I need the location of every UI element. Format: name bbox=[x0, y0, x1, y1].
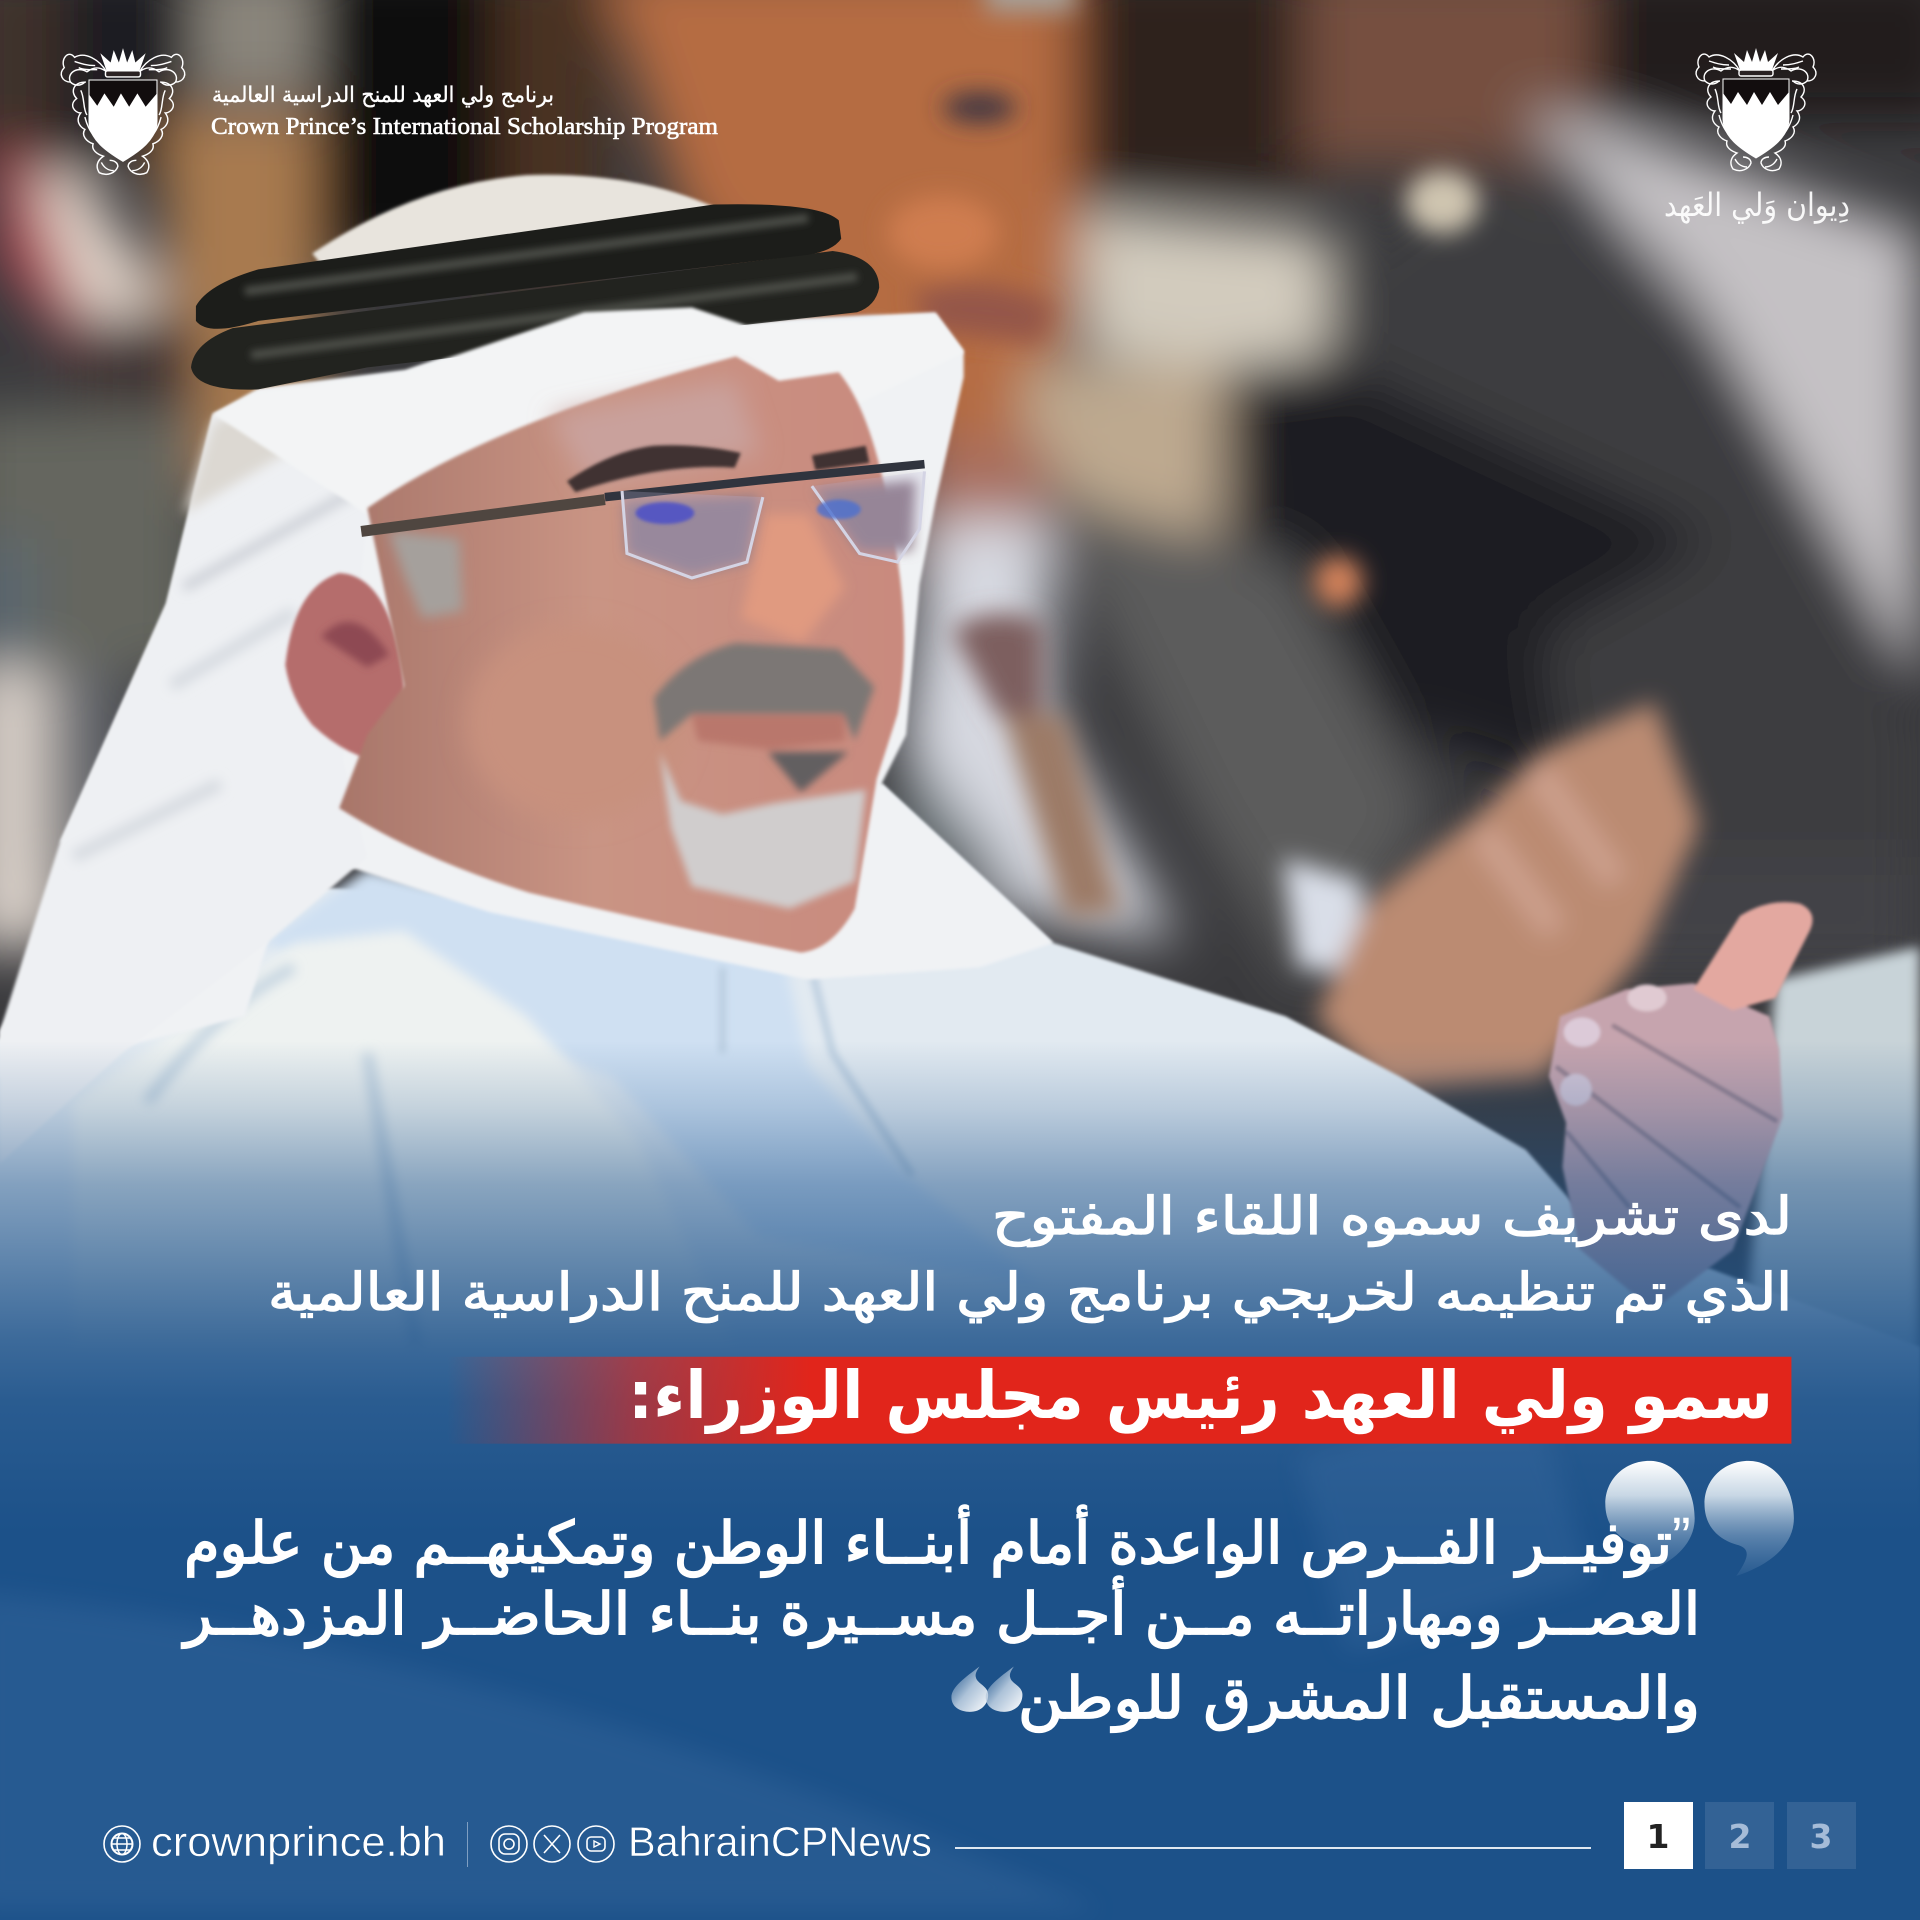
quote text bbox=[181, 1505, 1700, 1733]
intro text: الذي تم تنظيمه لخريجي برنامج ولي العهد للمنح الدراسية العالمية bbox=[268, 1263, 1792, 1323]
intro text: لدى تشريف سموه اللقاء المفتوح bbox=[992, 1187, 1792, 1247]
big opening quote marks bbox=[1605, 1461, 1794, 1576]
main figure: clapping hand bbox=[1549, 902, 1813, 1310]
right crest and diwan calligraphy bbox=[1664, 48, 1850, 224]
main figure: beard bbox=[654, 643, 874, 909]
social footer item: BahrainCPNews bbox=[628, 1818, 932, 1865]
main figure: agal black band bbox=[191, 204, 964, 514]
red heading bar bbox=[447, 1357, 1791, 1444]
main figure: thobe bbox=[0, 784, 1920, 1898]
page indicator 2 bbox=[1705, 1802, 1774, 1869]
icon: youtube bbox=[578, 1826, 614, 1862]
website footer item: crownprince.bh bbox=[151, 1818, 446, 1865]
blue fade overlay bbox=[0, 1041, 1920, 1920]
icon: x bbox=[534, 1826, 570, 1862]
scholarship program logotype: Crown Prince’s International Scholarship Program bbox=[211, 114, 718, 140]
social footer item bbox=[491, 1818, 932, 1865]
scholarship program logotype bbox=[211, 83, 718, 140]
main figure: glasses bbox=[361, 464, 924, 578]
page indicator 1: 1 bbox=[1647, 1817, 1669, 1856]
heading on red bar: سمو ولي العهد رئيس مجلس الوزراء: bbox=[628, 1357, 1773, 1435]
page indicator 3: 3 bbox=[1810, 1817, 1832, 1856]
page indicator 1 bbox=[1624, 1802, 1693, 1869]
quote text: والمستقبل المشرق للوطن bbox=[1018, 1664, 1700, 1733]
scholarship program logotype: برنامج ولي العهد للمنح الدراسية العالمية bbox=[212, 83, 554, 108]
quote text: ” bbox=[1672, 1505, 1691, 1568]
page indicator 3 bbox=[1787, 1802, 1856, 1869]
quote text: العصــر ومهاراتــه مــن أجــل مســيرة بنــاء الحاضــر المزدهــر bbox=[181, 1576, 1700, 1649]
main figure: face bbox=[285, 356, 916, 953]
icon: globe bbox=[104, 1826, 140, 1862]
intro text bbox=[268, 1187, 1792, 1323]
small closing quote marks bbox=[951, 1667, 1022, 1712]
right crest and diwan calligraphy: دِيوان وَلي العَهد bbox=[1664, 186, 1850, 224]
icon: instagram bbox=[491, 1826, 527, 1862]
audience background bbox=[0, 0, 1920, 1408]
page indicator 2: 2 bbox=[1729, 1817, 1751, 1856]
main figure: ghutra headdress bbox=[0, 175, 1053, 1163]
quote text: توفيــر الفــرص الواعدة أمام أبنــاء الوطن وتمكينهــم من علوم bbox=[184, 1505, 1672, 1578]
subtle lighter folds in blue area bbox=[0, 1384, 1592, 1910]
left crest logo bbox=[61, 48, 185, 174]
